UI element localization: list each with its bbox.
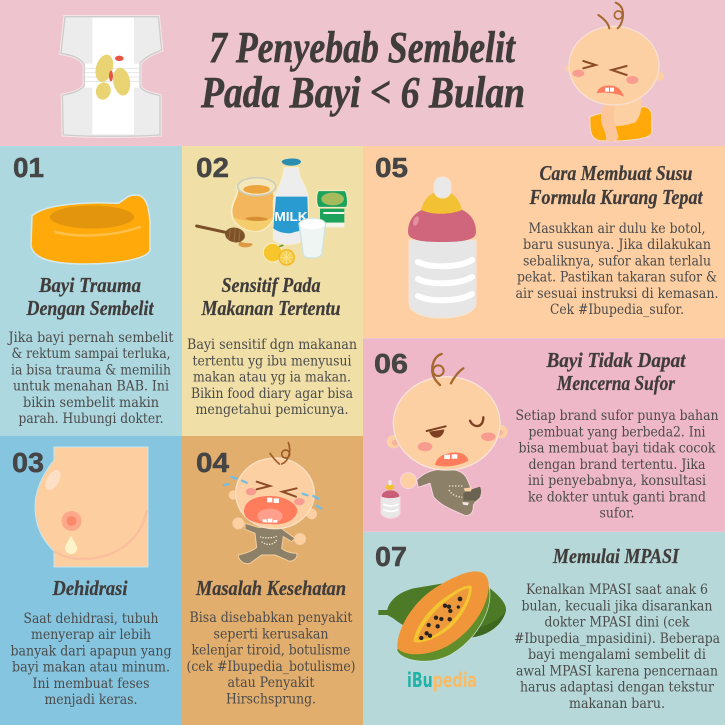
text 02: Bikin food diary agar bisa [191, 386, 353, 402]
heading 07: Memulai MPASI [552, 544, 680, 568]
text 04: atau Penyakit [228, 675, 315, 691]
text 07: bayi mengalami sembelit di [528, 647, 706, 663]
heading 03: Dehidrasi [52, 576, 128, 600]
number 05: 05 [375, 152, 408, 183]
text 04: (cek #Ibupedia_botulisme) [186, 659, 356, 675]
panel 07: background [363, 532, 725, 725]
heading 05 [529, 161, 703, 209]
text 01: parah. Hubungi dokter. [18, 411, 164, 427]
text 02: tertentu yg ibu menyusui [192, 354, 352, 370]
icon: foods [197, 159, 347, 265]
heading 06: Mencerna Sufor [556, 371, 676, 395]
heading 02: Makanan Tertentu [201, 296, 340, 320]
text 04: Bisa disebabkan penyakit [190, 610, 353, 626]
icon: sitting baby [381, 354, 508, 518]
heading 02: Sensitif Pada [222, 273, 320, 297]
text 06: dengan brand tertentu. Jika [528, 457, 706, 473]
panel 04: background [182, 436, 363, 725]
text 06 [516, 408, 718, 522]
icon: milk bottle [408, 177, 476, 318]
heading 01: Bayi Trauma [38, 273, 141, 297]
heading 05: Formula Kurang Tepat [529, 185, 703, 209]
text 01: & rektum sampai terluka, [12, 346, 170, 362]
icon: diaper [61, 17, 162, 136]
heading 04: Masalah Kesehatan [195, 576, 346, 600]
text 05: Cek #Ibupedia_sufor. [550, 302, 684, 318]
text 03: Ini membuat feses [32, 676, 150, 692]
heading 06 [546, 348, 687, 395]
text 06: ini penyebabnya, konsultasi [528, 473, 706, 489]
text 01: bikin sembelit makin [23, 395, 159, 411]
title: 7 Penyebab Sembelit [209, 23, 516, 72]
text 07: Kenalkan MPASI saat anak 6 [526, 582, 708, 598]
text 06: ke dokter untuk ganti brand [528, 490, 706, 506]
number 02: 02 [196, 152, 229, 183]
text 01: ia bisa trauma & memilih [11, 362, 171, 378]
icon: crying baby [224, 443, 321, 564]
title [200, 23, 525, 117]
icon: baby on potty [565, 3, 664, 141]
panel 01: background [0, 146, 182, 436]
text 02: mengetahui pemicunya. [196, 402, 348, 418]
heading 01: Dengan Sembelit [26, 296, 154, 320]
text 04 [186, 610, 356, 708]
heading 05: Cara Membuat Susu [540, 161, 692, 185]
number 06: 06 [374, 348, 408, 379]
text 01: untuk menahan BAB. Ini [13, 378, 169, 394]
icon: breast [35, 447, 148, 567]
logo: iBupedia: iBupedia [407, 668, 477, 692]
text 05: Masukkan air dulu ke botol, [528, 221, 706, 237]
text 06: pembuat yang berbeda2. Ini [528, 424, 706, 440]
text 03 [10, 611, 172, 708]
panel 06: background [363, 339, 725, 531]
text 05 [516, 221, 718, 318]
text 04: seperti kerusakan [214, 626, 328, 642]
icon: foods: MILK [274, 209, 308, 224]
number 07: 07 [375, 541, 407, 572]
text 03: Saat dehidrasi, tubuh [24, 611, 158, 627]
text 01: Jika bayi pernah sembelit [7, 330, 174, 346]
text 07: dokter MPASI dini (cek [544, 614, 690, 630]
text 02: makan atau yg ia makan. [193, 370, 351, 386]
heading 02 [201, 273, 340, 320]
title: Pada Bayi < 6 Bulan [200, 68, 525, 117]
text 07: makanan baru. [569, 696, 665, 712]
text 02 [187, 337, 357, 418]
heading 06: Bayi Tidak Dapat [546, 348, 687, 372]
heading 01 [26, 273, 154, 320]
text 03: menyerap air lebih [31, 627, 151, 643]
text 07 [514, 582, 720, 712]
text 03: bayi makan atau minum. [12, 660, 170, 676]
number 03: 03 [12, 447, 44, 478]
number 01: 01 [13, 152, 44, 183]
text 06: sufor. [600, 506, 634, 522]
text 01 [7, 330, 174, 427]
text 05: baru susunya. Jika dilakukan [523, 237, 711, 253]
text 04: kelenjar tiroid, botulisme [192, 642, 350, 658]
number 04: 04 [196, 447, 229, 478]
panel: header [0, 0, 725, 146]
text 04: Hirschsprung. [226, 692, 316, 708]
icon: papaya [378, 571, 506, 661]
text 02: Bayi sensitif dgn makanan [187, 337, 357, 353]
panel 05: background [363, 146, 725, 338]
panel 02: background [182, 146, 363, 436]
panel 03: background [0, 436, 182, 725]
text 03: banyak dari apapun yang [10, 644, 172, 660]
text 03: menjadi keras. [44, 692, 138, 708]
icon: potty [31, 195, 150, 264]
